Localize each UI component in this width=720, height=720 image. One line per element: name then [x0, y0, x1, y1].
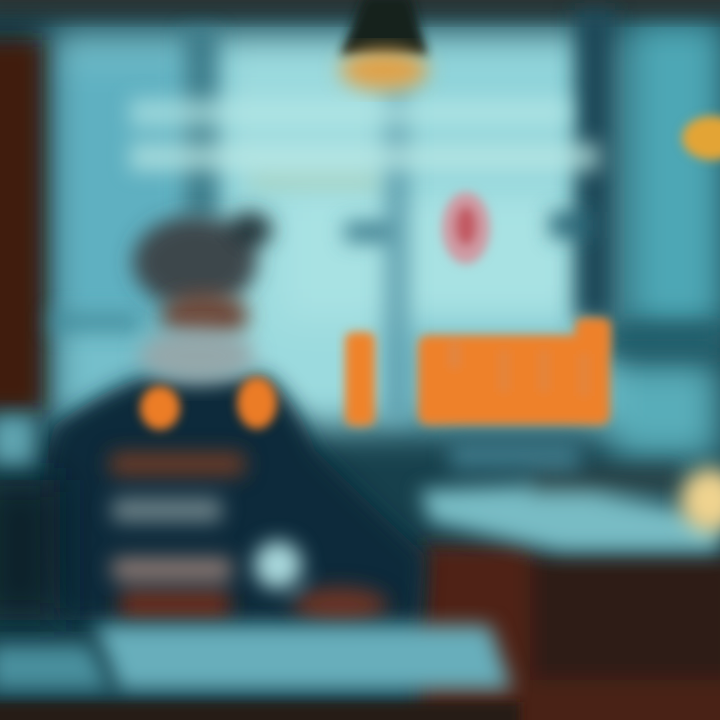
window panes	[50, 20, 720, 460]
left wall	[0, 40, 42, 410]
right orange light	[682, 116, 720, 160]
ceiling lamp	[340, 0, 428, 90]
window frames	[50, 10, 720, 420]
desk top	[95, 625, 512, 690]
lamp glow	[340, 50, 428, 90]
orange dot left	[140, 386, 180, 430]
body	[41, 375, 425, 620]
mask	[139, 328, 255, 384]
icon: red shield	[442, 192, 490, 264]
orange word block	[418, 318, 611, 425]
shirt stripes	[110, 452, 245, 620]
counter shelf	[420, 440, 720, 552]
lamp shade	[340, 0, 428, 55]
desk left	[0, 645, 110, 690]
lamp right bottom	[680, 468, 720, 532]
ceiling band	[0, 0, 720, 16]
left window ledge	[0, 415, 35, 465]
blurred heading lines	[130, 98, 600, 186]
orange bar left	[345, 332, 375, 426]
left-edge shadow	[0, 480, 60, 620]
desk	[0, 625, 520, 720]
desk bottom edge	[0, 702, 520, 720]
lower right room	[420, 545, 720, 720]
orange dot right	[237, 377, 277, 429]
person	[0, 212, 425, 620]
face	[161, 292, 249, 340]
hair	[133, 212, 272, 308]
hands	[254, 541, 388, 623]
